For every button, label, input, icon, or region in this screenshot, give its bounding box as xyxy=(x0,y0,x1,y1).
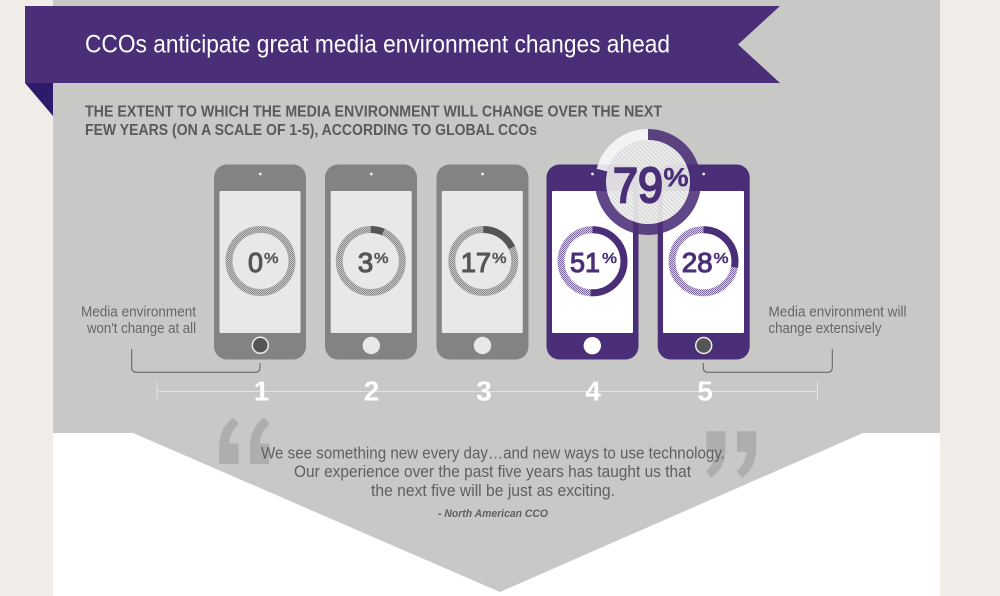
scale axis: 1 xyxy=(254,376,269,406)
phone 5: 28%: % xyxy=(714,250,728,267)
quote text: Our experience over the past five years has taught us that xyxy=(294,462,691,481)
quote attribution: - North American CCO xyxy=(438,508,548,520)
phone 4: 51%: % xyxy=(602,250,617,267)
scale axis: 4 xyxy=(585,376,601,406)
title: CCOs anticipate great media environment changes ahead xyxy=(85,30,670,58)
phone 2: 3% xyxy=(325,164,417,360)
quote text xyxy=(261,444,725,500)
callout: 79% combined ring: % xyxy=(664,164,688,192)
bracket: low end xyxy=(132,349,260,372)
phone 3: 17%: % xyxy=(492,250,506,267)
label: high end of scale: Media environment will xyxy=(768,304,906,320)
phone 3: 17% xyxy=(436,164,528,360)
label: high end of scale: change extensively xyxy=(768,321,882,337)
callout: 79% combined ring xyxy=(590,124,706,240)
icon: opening quotation mark xyxy=(219,418,270,464)
phone 4: 51%: 51 xyxy=(570,247,600,278)
phone 1: 0%: % xyxy=(264,250,278,267)
icon: closing quotation mark xyxy=(706,431,756,478)
ribbon body xyxy=(25,6,780,83)
phone 3: 17%: 17 xyxy=(461,247,491,278)
phone 4: 51% xyxy=(546,164,638,360)
label: low end of scale: Media environment xyxy=(81,304,196,320)
phone 5: 28% xyxy=(658,164,750,360)
quote text: We see something new every day…and new ways to use technology. xyxy=(261,444,725,462)
ribbon fold xyxy=(25,83,53,116)
phone 2: 3%: % xyxy=(374,250,388,267)
subheading: THE EXTENT TO WHICH THE MEDIA ENVIRONMENT WILL CHANGE OVER THE NEXT xyxy=(85,104,662,120)
callout: 79% combined ring: 79 xyxy=(613,159,663,213)
phone 5: 28%: 28 xyxy=(682,247,713,278)
scale axis xyxy=(157,376,818,406)
scale axis: 3 xyxy=(476,376,492,406)
phone 1: 0% xyxy=(214,164,306,360)
label: low end of scale: won't change at all xyxy=(86,321,196,337)
label: low end of scale xyxy=(81,304,196,337)
subheading: FEW YEARS (ON A SCALE OF 1-5), ACCORDING TO GLOBAL CCOs xyxy=(85,122,537,139)
banner: title ribbon xyxy=(25,6,780,116)
phone 2: 3%: 3 xyxy=(358,247,373,278)
quote text: the next five will be just as exciting. xyxy=(371,481,615,500)
scale axis: 2 xyxy=(364,376,379,406)
label: high end of scale xyxy=(768,304,906,337)
bracket: high end xyxy=(703,349,832,372)
subheading xyxy=(85,104,662,139)
phone 1: 0%: 0 xyxy=(248,247,263,278)
scale axis: 5 xyxy=(697,376,713,406)
